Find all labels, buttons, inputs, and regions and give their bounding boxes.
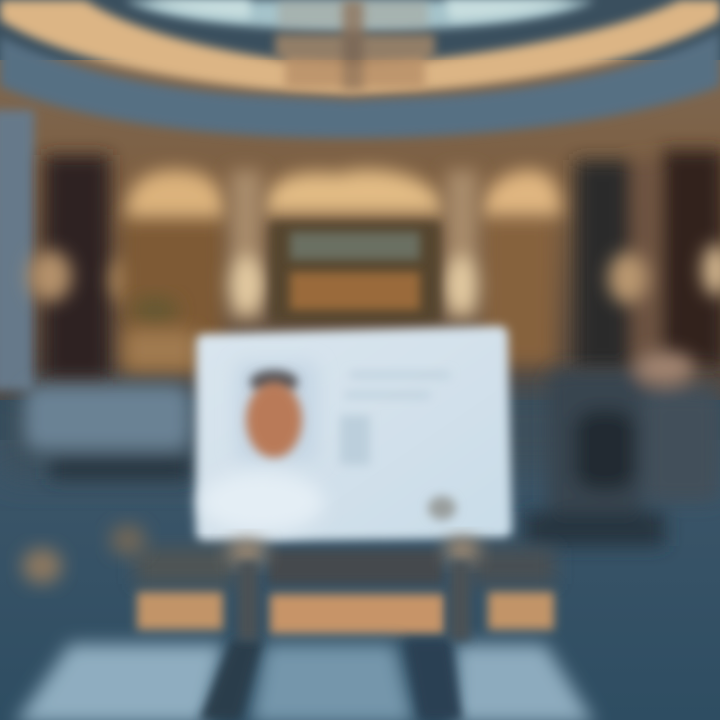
ID card bbox=[196, 326, 512, 542]
alcove lower glow bbox=[125, 330, 195, 370]
sign top plate bbox=[290, 232, 420, 260]
dark legs bbox=[200, 640, 262, 720]
floor bbox=[0, 440, 720, 720]
portrait face bbox=[246, 382, 302, 458]
alcove interiors bbox=[122, 215, 556, 370]
glowing arches bbox=[125, 170, 562, 218]
skylight bbox=[125, 0, 595, 30]
left sofa bbox=[25, 385, 190, 479]
right sofa group bbox=[525, 351, 720, 546]
skylight highlights bbox=[145, 0, 575, 20]
desk front bbox=[22, 524, 555, 634]
portrait hair bbox=[250, 370, 298, 394]
arched alcoves bbox=[122, 170, 562, 370]
central sign panel bbox=[270, 222, 440, 322]
ceiling dark surround bbox=[0, 0, 720, 60]
light columns bbox=[228, 170, 479, 320]
vertical arms bbox=[238, 562, 258, 640]
background wall bbox=[0, 0, 720, 400]
side dim panels bbox=[135, 548, 235, 584]
card seal bbox=[428, 496, 456, 520]
portrait backdrop bbox=[236, 362, 318, 462]
chandelier bbox=[275, 0, 435, 90]
lamps on pillars bbox=[28, 244, 720, 304]
plant bbox=[131, 296, 179, 324]
card text blur bbox=[340, 372, 450, 465]
thumbs bbox=[227, 539, 267, 565]
blue-grey cornice band bbox=[0, 32, 720, 138]
golden ceiling band bbox=[0, 0, 720, 95]
dark pillars bbox=[44, 150, 720, 380]
left grey column bbox=[0, 110, 34, 390]
portrait shoulders bbox=[200, 472, 324, 532]
carpet bbox=[15, 562, 595, 720]
card body bbox=[196, 326, 512, 542]
spots bbox=[22, 548, 62, 584]
orange bars bbox=[137, 592, 554, 634]
dark strip bbox=[268, 550, 443, 584]
sign glow bbox=[290, 272, 420, 310]
ceiling bbox=[0, 0, 720, 138]
